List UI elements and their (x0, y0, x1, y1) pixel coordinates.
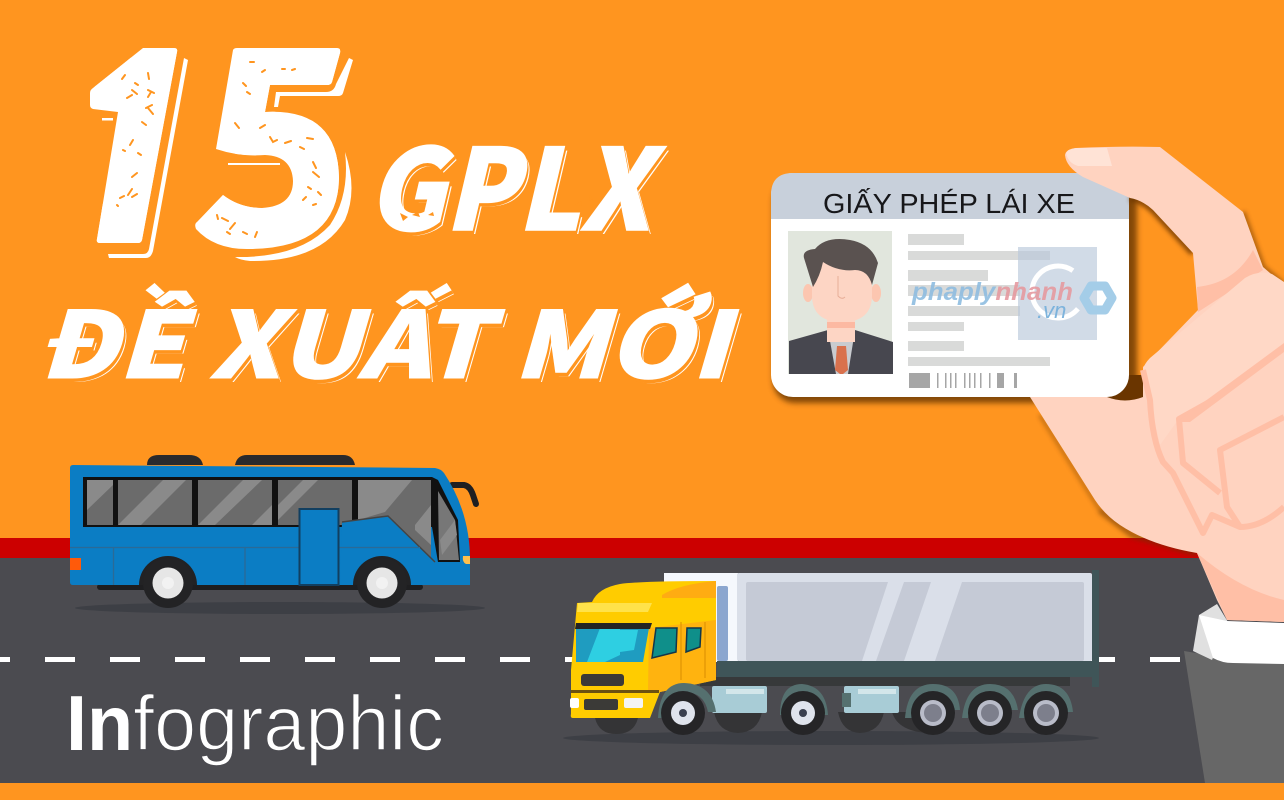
finger crease band (1177, 343, 1284, 422)
trailer front (664, 573, 738, 661)
text placeholder bars (908, 234, 1050, 366)
cab light strip (577, 603, 652, 612)
hand holding card (1030, 147, 1284, 783)
bus shadow (75, 602, 485, 614)
truck (563, 570, 1099, 745)
fuel tanks (712, 686, 899, 713)
shirt shadow (1193, 604, 1228, 660)
sleeve (1184, 651, 1284, 783)
bus mirror (452, 485, 476, 504)
truck cab (571, 581, 716, 718)
portrait (788, 231, 893, 374)
title: ĐỀ XUẤT MỚI: ĐỀ XUẤT MỚI (36, 272, 739, 405)
headlights (570, 698, 579, 708)
chassis (700, 677, 1070, 686)
label: Infographic: Infographic (66, 679, 444, 767)
finger folds (1143, 370, 1284, 533)
thumb nail (1066, 148, 1112, 166)
road (0, 558, 1284, 783)
title speckles (117, 62, 321, 237)
watermark: phaplynhanh (911, 278, 1073, 306)
tie (835, 346, 848, 374)
red roadside band (0, 538, 1284, 558)
road centre dashes (0, 657, 1284, 662)
title: 15 (90, 48, 353, 261)
title: ĐỀ XUẤT MỚI: ĐỀ XUẤT MỚI (37, 275, 740, 408)
fenders (658, 683, 1073, 718)
bus head light (463, 556, 470, 564)
truck shadow (563, 731, 1099, 745)
door windows (652, 628, 677, 658)
bus undercarriage (97, 584, 423, 590)
bus windows (83, 477, 460, 562)
bus tail light (70, 558, 81, 570)
index finger highlight (1143, 273, 1284, 445)
bus body lines (70, 547, 420, 585)
title: ĐỀ XUẤT MỚI: ĐỀ XUẤT MỚI (39, 276, 742, 409)
hand edge shadows (1040, 198, 1284, 553)
barcode (909, 373, 1017, 388)
title: GPLX: GPLX (368, 104, 667, 266)
suit (789, 330, 893, 374)
shirt cuff (1199, 615, 1284, 664)
palm and fingers (1030, 147, 1284, 622)
trailer side panel (737, 573, 1092, 661)
watermark (911, 247, 1112, 340)
trailer reflections (862, 582, 962, 661)
card header (771, 173, 1129, 219)
title: GPLX: GPLX (370, 105, 669, 267)
grille (581, 674, 624, 686)
card shadow (773, 179, 1137, 403)
bus roof units (147, 455, 355, 465)
licence card (771, 173, 1144, 405)
truck wheels (661, 691, 1068, 735)
cab door orange (648, 620, 716, 692)
windshield (576, 628, 649, 662)
wrist shade (1197, 553, 1284, 622)
hair (804, 239, 878, 287)
title: GPLX: GPLX (367, 101, 666, 263)
trailer post and deck (717, 570, 1099, 687)
cab roof shade (662, 581, 716, 598)
face (812, 258, 872, 322)
shirt (828, 330, 855, 374)
bus hood panel (340, 516, 470, 585)
digit shadows (102, 58, 353, 261)
bus body (70, 465, 470, 585)
nose (838, 276, 845, 298)
ears (803, 284, 813, 302)
card base (771, 173, 1129, 397)
truck ground shadows under tanks (595, 712, 930, 734)
thumb web shade (1197, 250, 1263, 312)
bus door (300, 509, 338, 585)
visor (575, 623, 652, 629)
neck (827, 318, 855, 342)
card title: GIẤY PHÉP LÁI XE (823, 188, 1075, 219)
bus (70, 455, 485, 614)
watermark: .vn (1037, 298, 1066, 323)
bus window reflections (87, 480, 457, 555)
bus wheels (139, 556, 411, 608)
card corner hole shadow (1100, 375, 1144, 405)
